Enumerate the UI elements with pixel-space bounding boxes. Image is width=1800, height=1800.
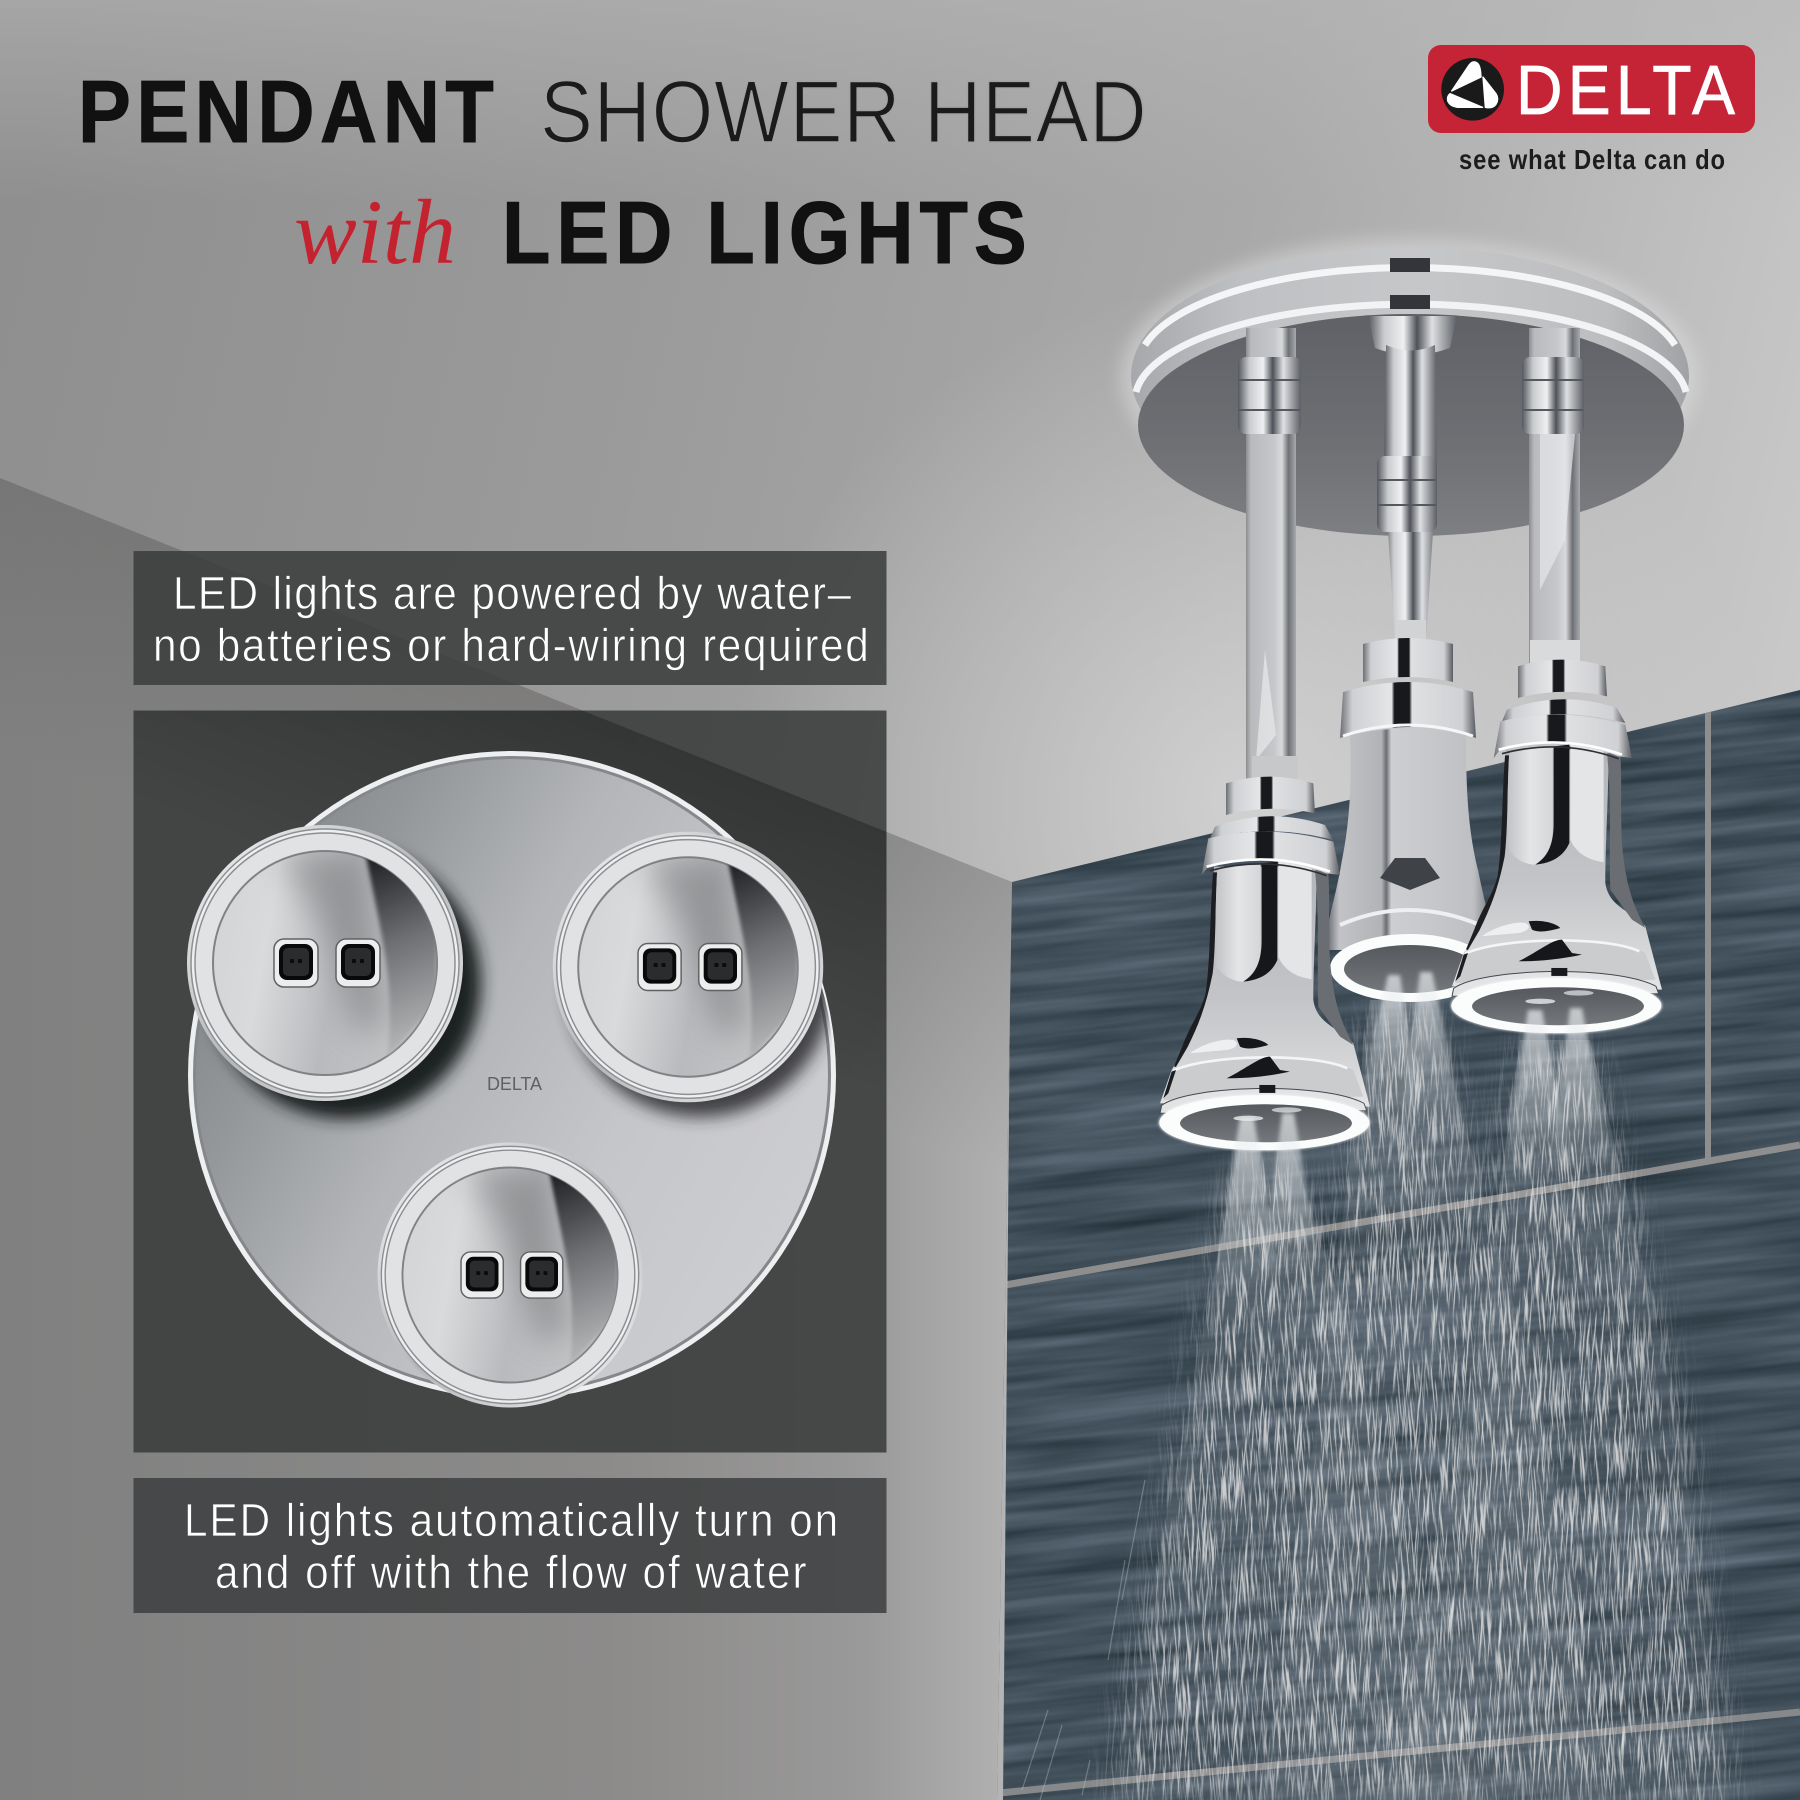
spray disc: upper left [187, 825, 463, 1101]
panel: spray face close-up [134, 710, 886, 1452]
tile wall [950, 660, 1800, 1800]
title line 2: with LED LIGHTS [294, 181, 1027, 283]
callout text [153, 568, 869, 671]
panel: LED power callout [134, 551, 886, 685]
left wall [0, 470, 1012, 1800]
title line 1: PENDANT SHOWER HEAD: PENDANT [78, 62, 494, 161]
tagline: see what Delta can do [1459, 143, 1725, 175]
panel: automatic on/off callout [134, 1478, 886, 1613]
title line 2: with LED LIGHTS: with [294, 181, 456, 283]
callout text: and off with the flow of water [215, 1547, 807, 1598]
title [78, 62, 1147, 283]
water jets leaving nozzles [1212, 972, 1612, 1290]
title line 2: with LED LIGHTS: LED LIGHTS [502, 183, 1027, 282]
right pendant [1451, 328, 1662, 1034]
callout text: LED lights automatically turn on [184, 1495, 838, 1546]
spray disc: bottom [378, 1143, 642, 1407]
wordmark: DELTA [1516, 52, 1735, 130]
chrome plate [188, 751, 836, 1399]
left pendant [1159, 328, 1370, 1151]
spray disc: upper right [553, 832, 823, 1102]
Delta logo [1428, 45, 1755, 175]
ceiling canopy [1120, 238, 1700, 536]
title line 1: PENDANT SHOWER HEAD [78, 62, 1147, 161]
callout text: no batteries or hard-wiring required [153, 620, 869, 671]
callout text: LED lights are powered by water– [173, 568, 851, 619]
red badge [1428, 45, 1755, 133]
ceiling [0, 0, 1800, 1000]
engraved DELTA label: DELTA [487, 1074, 542, 1094]
pendant shower head photo [1120, 238, 1700, 1290]
center pendant [1328, 345, 1490, 1002]
spray haze [1110, 1000, 1730, 1800]
icon: Delta mark [1441, 58, 1504, 121]
stray droplets [1022, 1480, 1722, 1800]
callout text [184, 1495, 838, 1598]
water spray [1000, 1000, 1800, 1800]
water streaks [1093, 1000, 1748, 1800]
title line 1: PENDANT SHOWER HEAD: SHOWER HEAD [540, 62, 1147, 161]
